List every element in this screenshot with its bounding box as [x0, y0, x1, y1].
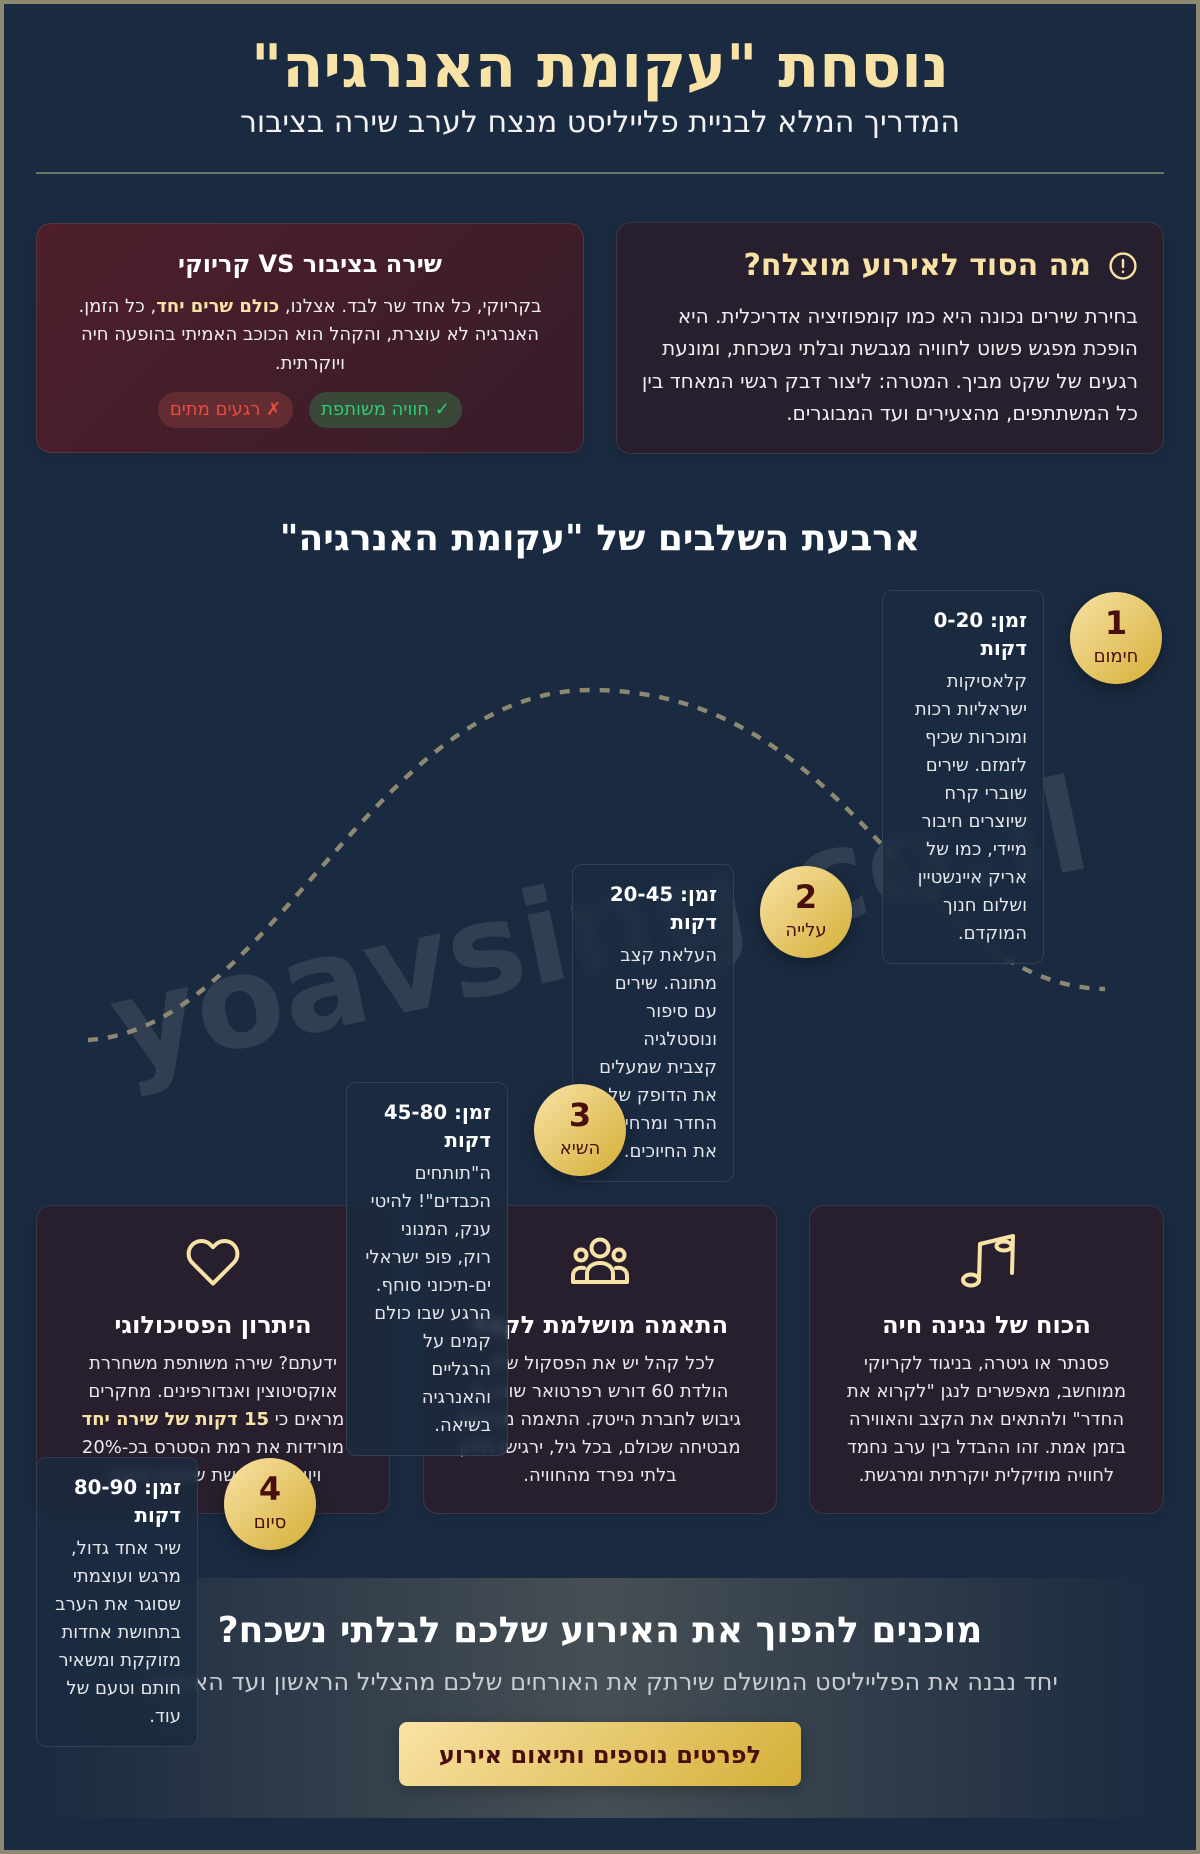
body text: בלתי נפרד מהחוויה.: [523, 1465, 677, 1486]
stage 1 description: ומוכרות שכיף: [925, 727, 1027, 748]
stage 3 description: הכבדים"! להיטי: [371, 1191, 491, 1212]
stage 1 description: שיוצרים חיבור: [922, 811, 1027, 832]
body text: ויוקרתית.: [275, 353, 345, 374]
stage 4 description: דקות: [134, 1504, 181, 1527]
stage 2 badge: [760, 866, 852, 958]
stage 3 description: רוק, פופ ישראלי: [365, 1247, 491, 1268]
body text: אוקסיטוצין ואנדורפינים. מחקרים: [88, 1381, 338, 1402]
heading: הכוח של נגינה חיה: [882, 1311, 1091, 1339]
stage 2 badge: עלייה: [785, 920, 827, 941]
stage 4 description: עוד.: [149, 1706, 181, 1727]
stage 1 description: שוברי קרח: [944, 783, 1027, 804]
stage 4 badge: סיום: [254, 1512, 286, 1533]
stage 3: peak: [346, 1082, 633, 1456]
stage 2 description: מתונה. שירים: [615, 973, 717, 994]
CTA subtext: יחד נבנה את הפלייליסט המושלם שירתק את האורחים שלכם מהצליל הראשון ועד האחרון.: [142, 1668, 1058, 1696]
stage 1 badge: חימום: [1094, 646, 1138, 667]
stage 1 description: [882, 590, 1044, 964]
stage 4 description: שיר אחד גדול,: [71, 1538, 181, 1559]
heading: היתרון הפסיכולוגי: [114, 1311, 312, 1339]
CTA button: לפרטים נוספים ותיאום אירוע: [439, 1741, 761, 1769]
panel: live music: [809, 1205, 1164, 1514]
pill: shared experience: ✓ חוויה משותפת: [321, 399, 450, 420]
stage 3 description: ענק, המנוני: [401, 1219, 491, 1240]
stage 1 badge: [1070, 592, 1162, 684]
body text: בחירת שירים נכונה היא כמו קומפוזיציה אדריכלית. היא: [678, 304, 1138, 328]
pill: shared experience: [309, 392, 462, 428]
body text: מבטיחה שכולם, בכל גיל, ירגישו חלק: [459, 1437, 741, 1458]
stage 2 description: את החיוכים.: [624, 1141, 717, 1162]
stage 4 description: [36, 1457, 198, 1747]
stage 3 badge: השיא: [560, 1138, 600, 1159]
stage 3 description: דקות: [444, 1129, 491, 1152]
pill: dead moments: [158, 392, 293, 428]
stage 2 description: קצבית שמעלים: [599, 1057, 717, 1078]
stage 4 description: שסוגר את הערב: [55, 1594, 181, 1615]
heading: התאמה מושלמת לקהל: [472, 1311, 728, 1339]
body text: הופכת מפגש פשוט לחוויה מגבשת ובלתי נשכחת, ומונעת: [662, 336, 1138, 360]
body text: [82, 1353, 344, 1486]
stage 3 description: זמן: 45-80: [384, 1101, 491, 1124]
stage 2 description: העלאת קצב: [620, 945, 717, 966]
stage 1 description: המוקדם.: [958, 923, 1027, 944]
body text: ויוצרות תחושת שייכות חזקה.: [105, 1465, 321, 1486]
panel: psychological benefit: [36, 1205, 390, 1514]
subtitle: המדריך המלא לבניית פלייליסט מנצח לערב שירה בציבור: [240, 105, 960, 140]
body text: לחוויה מוזיקלית יוקרתית ומרגשת.: [859, 1465, 1114, 1486]
watermark: yoavsing.co.il: [99, 750, 1101, 1103]
panel: secret of success: [616, 222, 1164, 454]
body text: רגעים של שקט מביך. המטרה: ליצור דבק רגשי המאחד בין: [642, 369, 1138, 393]
body text: מראים כי 15 דקות של שירה יחד: [82, 1409, 344, 1430]
body text: [642, 304, 1138, 425]
body text: [78, 296, 542, 374]
stage 4 badge: [224, 1458, 316, 1550]
stage 3 description: הרגע שבו כולם: [374, 1303, 491, 1324]
body text: האנרגיה לא עוצרת, והקהל הוא הכוכב האמיתי בהופעה חיה: [81, 324, 539, 345]
icon: alert circle: [1109, 252, 1137, 280]
stage 4 description: בתחושת אחדות: [61, 1622, 181, 1643]
icon: music note: [961, 1234, 1015, 1288]
body text: לכל קהל יש את הפסקול שלו.: [485, 1353, 715, 1374]
title: נוסחת "עקומת האנרגיה": [251, 32, 949, 102]
stage 3 description: ים-תיכוני סוחף.: [376, 1275, 491, 1296]
energy curve: [88, 688, 1105, 1042]
icon: heart: [186, 1239, 240, 1286]
body text: [847, 1353, 1126, 1486]
CTA heading: מוכנים להפוך את האירוע שלכם לבלתי נשכח?: [218, 1610, 982, 1651]
stage 3 description: הרגליים: [431, 1359, 491, 1380]
stage 2 description: זמן: 20-45: [610, 883, 717, 906]
stage 3 description: והאנרגיה: [422, 1387, 491, 1408]
stage 1 description: ישראליות רכות: [915, 699, 1027, 720]
stage 2: rise: [572, 864, 855, 1182]
body text: [459, 1353, 741, 1486]
stage 4 description: חותם וטעם של: [66, 1678, 181, 1699]
stage 4 description: מרגש ועוצמתי: [73, 1566, 181, 1587]
panel: community singing vs karaoke: [36, 223, 584, 453]
stage 1 description: קלאסיקות: [947, 671, 1027, 692]
stage 4 description: מזוקקת ומשאיר: [58, 1650, 181, 1671]
stage 2 badge: 2: [795, 878, 817, 916]
stage 3 badge: 3: [569, 1096, 591, 1134]
stage 4 badge: 4: [259, 1470, 281, 1508]
stage 1 description: לזמזם. שירים: [926, 755, 1027, 776]
stage 1 description: אריק איינשטיין: [918, 867, 1027, 888]
icon: group of people: [571, 1238, 629, 1284]
stage 3 description: ה"תותחים: [415, 1163, 491, 1184]
stage 3 description: קמים על: [423, 1331, 491, 1352]
body text: החדר" ולהתאים את הקצב והאווירה: [849, 1409, 1124, 1430]
pill: dead moments: ✗ רגעים מתים: [170, 399, 281, 420]
stage 2 description: דקות: [670, 911, 717, 934]
stage 1 description: דקות: [980, 637, 1027, 660]
stage 3 description: בשיאה.: [434, 1415, 491, 1436]
body text: בזמן אמת. זהו ההבדל בין ערב נחמד: [847, 1437, 1126, 1458]
stage 4 description: זמן: 80-90: [74, 1476, 181, 1499]
heading: שירה בציבור VS קריוקי: [178, 250, 442, 278]
heading text: מה הסוד לאירוע מוצלח?: [743, 248, 1091, 283]
body text: פסנתר או גיטרה, בניגוד לקריוקי: [864, 1353, 1109, 1374]
stage 1 badge: 1: [1105, 604, 1127, 642]
stage 3 description: [346, 1082, 508, 1456]
CTA button: [399, 1722, 801, 1786]
body text: ידעתם? שירה משותפת משחררת: [89, 1353, 337, 1374]
call to action: [36, 1578, 1164, 1818]
panel: audience fit: [423, 1205, 777, 1514]
body text: כל המשתתפים, מהצעירים ועד המבוגרים.: [786, 401, 1138, 425]
body text: בקריוקי, כל אחד שר לבד. אצלנו, כולם שרים יחד, כל הזמן.: [78, 296, 542, 317]
stage 1 description: זמן: 0-20: [934, 609, 1027, 632]
stage 2 description: ונוסטלגיה: [643, 1029, 717, 1050]
header: [240, 32, 960, 140]
stage 1 description: ושלום חנוך: [943, 895, 1027, 916]
stage 2 description: עם סיפור: [646, 1001, 717, 1022]
stage 4: finale: [36, 1457, 317, 1747]
stage 2 description: החדר ומרחיבים: [598, 1113, 717, 1134]
stage 1: warm-up: [882, 590, 1163, 964]
stage 2 description: [572, 864, 734, 1182]
body text: מורידות את רמת הסטרס בכ-20%: [82, 1437, 344, 1458]
heading with alert icon: [743, 248, 1137, 283]
stage 2 description: את הדופק של: [608, 1085, 717, 1106]
body text: גיבוש לחברת הייטק. התאמה מדויקת: [459, 1409, 741, 1430]
body text: ממוחשב, מאפשרים לנגן "לקרוא את: [847, 1381, 1126, 1402]
stage 3 badge: [534, 1084, 626, 1176]
stage 1 description: מיידי, כמו של: [926, 839, 1027, 860]
body text: הולדת 60 דורש רפרטואר שונה מ: [472, 1381, 728, 1402]
section heading: four stages: ארבעת השלבים של "עקומת האנרגיה": [280, 518, 920, 559]
